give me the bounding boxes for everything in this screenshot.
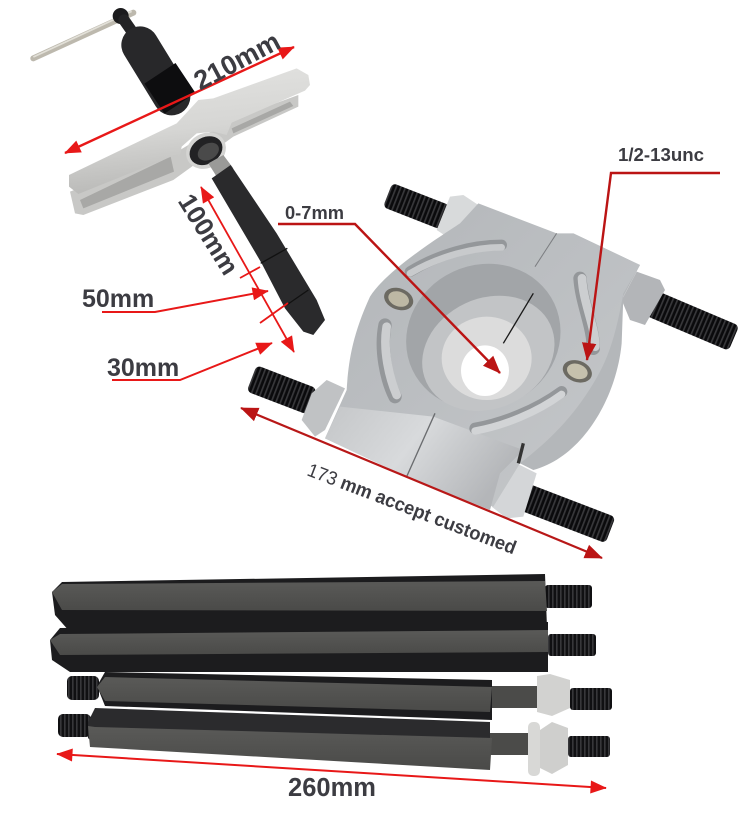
tool handle (33, 8, 133, 58)
dimension arrow: 260mm (57, 754, 606, 788)
main face (325, 203, 640, 507)
collar bearing (179, 125, 233, 177)
rod 2 (50, 622, 596, 672)
label: 0-7mm: 0-7mm (285, 203, 344, 223)
dimension arrow: 173mm (241, 408, 602, 558)
casting slots (383, 245, 595, 431)
dimension arrow: 50mm (102, 291, 268, 312)
front lower block (325, 407, 523, 510)
split lines (407, 233, 557, 477)
dimension arrow: 30mm (112, 343, 272, 380)
rod 1 (52, 574, 592, 632)
rod 3 (67, 672, 612, 720)
dimension arrow: 100mm (201, 187, 294, 352)
photo: T-bar puller tool (33, 8, 325, 335)
centre recess (382, 239, 585, 435)
label: 210mm: 210mm (189, 26, 285, 96)
threaded holes (381, 284, 595, 386)
dimension arrow: 210mm (65, 47, 294, 153)
rear shell (473, 233, 640, 470)
label: 100mm: 100mm (172, 188, 245, 280)
dimension arrow: 0-7mm (278, 224, 500, 373)
rod 4 (58, 708, 610, 776)
hex nuts (302, 195, 665, 518)
label: 173 mm accept customed: 173 mm accept customed (304, 460, 519, 559)
black shaft (212, 165, 325, 335)
silver cross bar (69, 68, 310, 215)
label: 30mm: 30mm (107, 354, 179, 382)
label: 260mm: 260mm (288, 774, 376, 802)
dimension arrow: 1/2-13unc (587, 173, 720, 360)
photo: bearing separator (247, 183, 739, 543)
photo: four extension rods (50, 574, 612, 776)
black screw body (124, 20, 180, 103)
threaded bolts (247, 183, 739, 543)
label: 50mm: 50mm (82, 285, 154, 313)
label: 1/2-13unc: 1/2-13unc (618, 144, 704, 165)
